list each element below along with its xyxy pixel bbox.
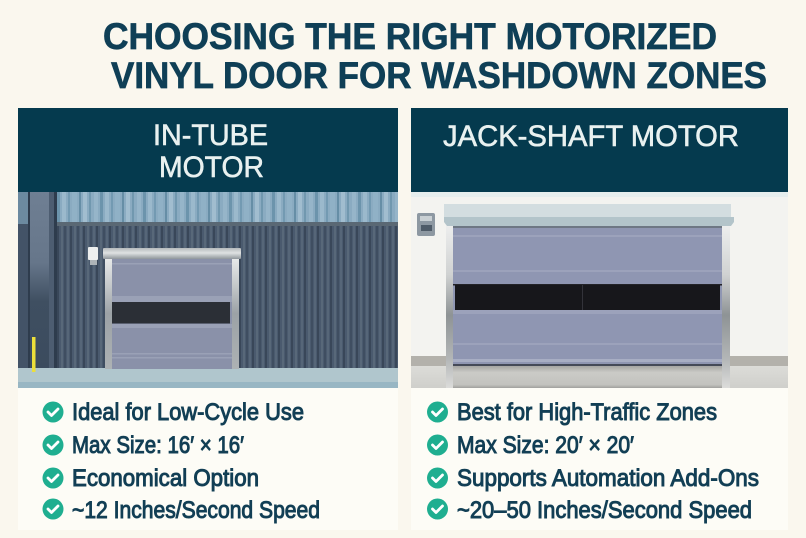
feature: automation add-ons: Supports Automation Add-Ons bbox=[457, 465, 759, 492]
feature: economical: Economical Option bbox=[72, 465, 259, 492]
panel: in-tube motor bbox=[18, 108, 398, 530]
header: jack-shaft motor: JACK-SHAFT MOTOR bbox=[443, 120, 739, 153]
panel background bbox=[18, 108, 398, 530]
feature: speed: ~12 Inches/Second Speed bbox=[72, 497, 320, 524]
photo: large door in white wall bbox=[411, 192, 788, 388]
feature: high-traffic zones: Best for High-Traffic Zones bbox=[457, 399, 717, 426]
title: VINYL DOOR FOR WASHDOWN ZONES bbox=[111, 55, 767, 96]
header: in-tube motor: IN-TUBE bbox=[153, 119, 268, 152]
feature: max size: Max Size: 20′ × 20′ bbox=[457, 432, 634, 459]
feature: speed: ~20–50 Inches/Second Speed bbox=[457, 497, 752, 524]
icon: wall sensor box bbox=[88, 247, 98, 265]
door assembly: in-tube bbox=[103, 248, 241, 369]
title bbox=[103, 16, 767, 96]
photo: small door in dark building wall bbox=[18, 192, 398, 388]
panel: jack-shaft motor bbox=[411, 108, 788, 530]
icon: yellow safety post bbox=[32, 337, 36, 372]
panel background bbox=[411, 108, 788, 530]
feature: max size: Max Size: 16′ × 16′ bbox=[72, 432, 244, 459]
icon: wall sensor box bbox=[417, 213, 435, 236]
header: jack-shaft motor bbox=[411, 108, 788, 192]
header: in-tube motor: MOTOR bbox=[159, 151, 264, 184]
header: in-tube motor bbox=[18, 108, 398, 192]
feature list: in-tube bbox=[42, 399, 320, 524]
feature list: jack-shaft bbox=[427, 399, 759, 524]
title: CHOOSING THE RIGHT MOTORIZED bbox=[103, 16, 717, 57]
feature: low-cycle use: Ideal for Low-Cycle Use bbox=[72, 399, 304, 426]
door assembly: jack-shaft bbox=[444, 204, 734, 388]
